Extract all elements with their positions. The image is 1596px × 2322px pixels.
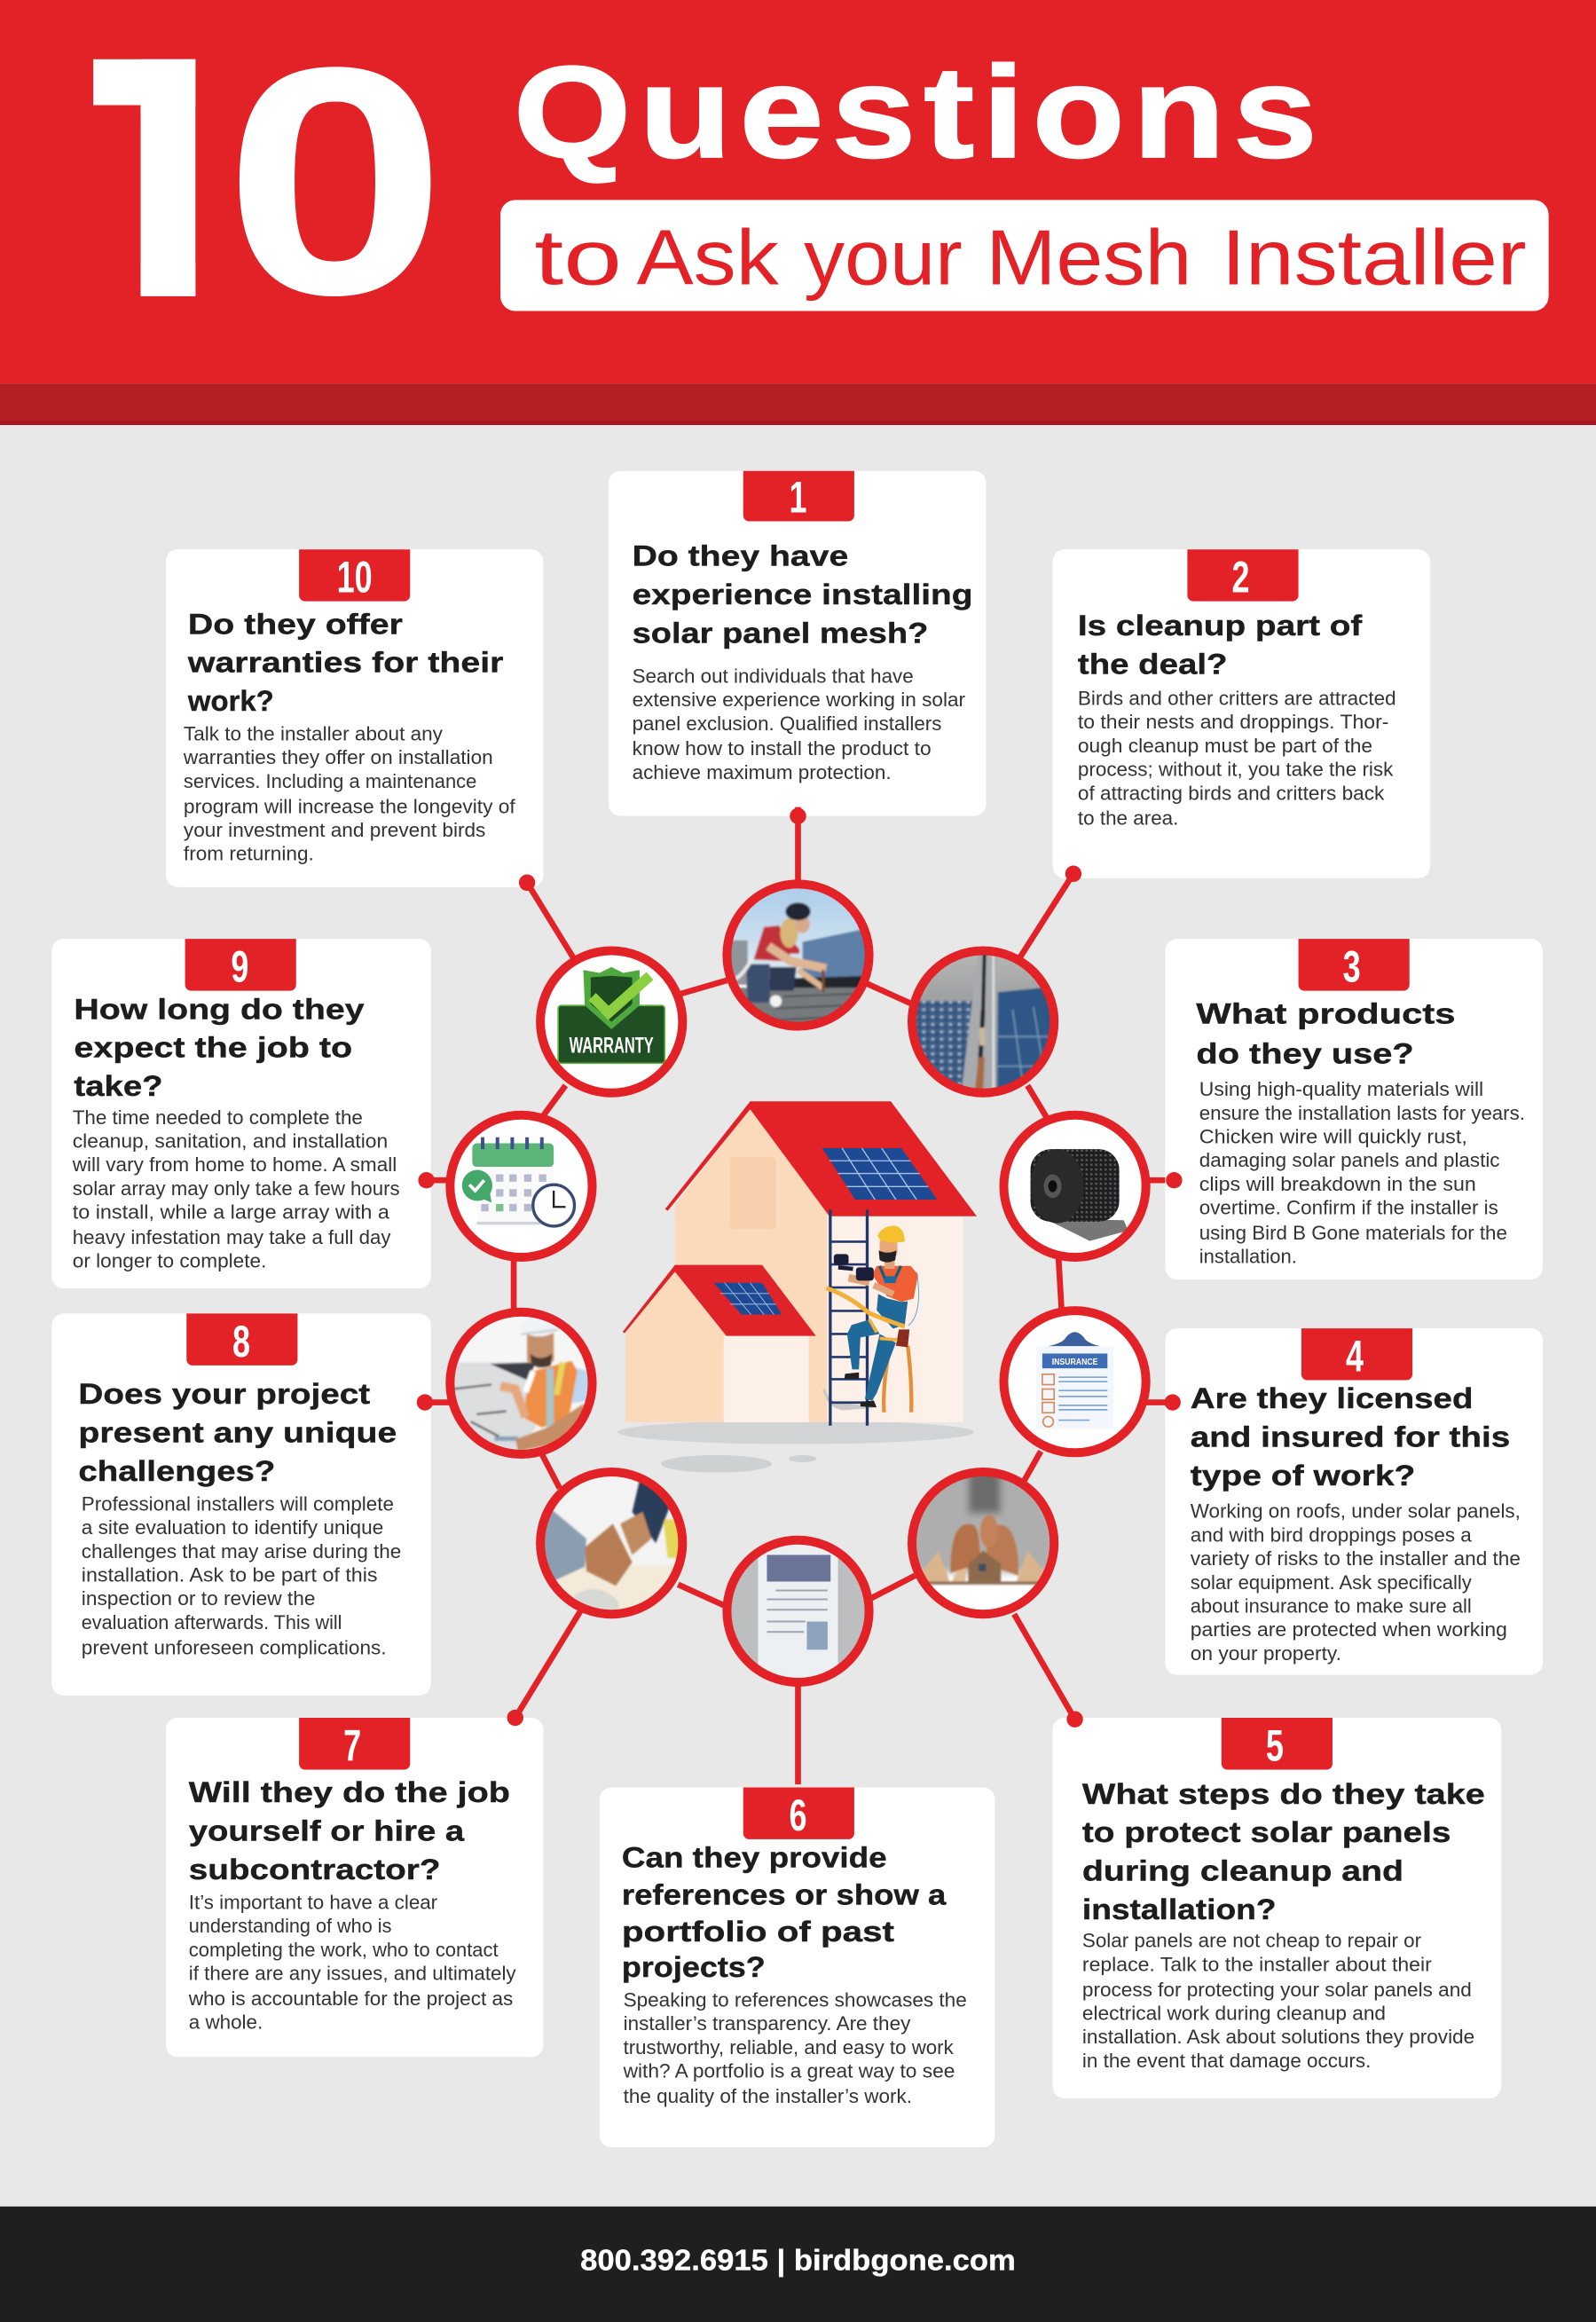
- panel: question 10: warranties they offer on installation: [183, 746, 493, 768]
- panel: question 5: [1053, 1712, 1501, 2098]
- panel: question 10: from returning.: [184, 843, 314, 865]
- panel: question 3: using Bird B Gone materials for the: [1199, 1222, 1507, 1244]
- panel: question 8: prevent unforeseen complications.: [82, 1636, 387, 1658]
- panel: question 5: What steps do they take: [1082, 1777, 1485, 1810]
- panel: question 9: [51, 939, 435, 1288]
- panel: question 4: 4: [1346, 1331, 1364, 1381]
- panel: question 6: references or show a: [622, 1877, 947, 1910]
- panel: question 10: work?: [187, 684, 274, 717]
- panel: question 3: [1165, 939, 1543, 1279]
- footer bar: 800.392.6915 | birdbgone.com: [580, 2245, 1016, 2278]
- panel: question 3: clips will breakdown in the sun: [1199, 1173, 1476, 1195]
- panel: question 4: solar equipment. Ask specifically: [1191, 1571, 1473, 1594]
- panel: question 6: Can they provide: [622, 1841, 887, 1874]
- panel: question 7: Will they do the job: [189, 1775, 510, 1808]
- panel: question 9: take?: [74, 1069, 163, 1102]
- panel: question 2: to their nests and droppings. Thor-: [1078, 711, 1388, 733]
- panel: question 5: 5: [1266, 1720, 1284, 1770]
- panel: question 2: 2: [1231, 553, 1249, 602]
- panel: question 1: Search out individuals that have: [633, 665, 914, 687]
- panel: question 5: during cleanup and: [1082, 1854, 1403, 1887]
- circle 4: insurance clipboard: [1003, 1311, 1146, 1452]
- panel: question 10: services. Including a maintenance: [184, 770, 476, 792]
- panel: question 3: installation.: [1199, 1246, 1297, 1268]
- circle 7: handshake photo: [538, 1468, 686, 1618]
- panel: question 4: type of work?: [1191, 1459, 1415, 1492]
- panel: question 4: on your property.: [1191, 1642, 1341, 1665]
- panel: question 7: a whole.: [189, 2011, 263, 2034]
- title: big number 10: 1: [74, 4, 250, 366]
- panel: question 1: 1: [789, 472, 807, 522]
- panel: question 2: Birds and other critters are attracted: [1078, 687, 1396, 709]
- panel: question 8: [51, 1313, 433, 1696]
- panel: question 5: installation?: [1082, 1893, 1277, 1925]
- panel: question 4: Working on roofs, under solar panels,: [1191, 1500, 1521, 1523]
- panel: question 7: yourself or hire a: [189, 1814, 465, 1847]
- subtitle box: your: [804, 213, 963, 301]
- subtitle box: [500, 200, 1549, 311]
- panel: question 9: How long do they: [74, 992, 366, 1025]
- panel: question 3: Using high-quality materials will: [1199, 1078, 1483, 1100]
- panel: question 7: 7: [343, 1720, 361, 1770]
- panel: question 9: will vary from home to home. A small: [72, 1153, 397, 1176]
- panel: question 1: [609, 471, 986, 824]
- circle 6: portfolio document: [727, 1540, 869, 1682]
- panel: question 9: The time needed to complete the: [73, 1106, 363, 1129]
- subtitle box: to: [534, 213, 622, 301]
- panel: question 3: damaging solar panels and plastic: [1199, 1149, 1500, 1171]
- panel: question 10: your investment and prevent birds: [184, 819, 485, 841]
- panel: question 9: expect the job to: [74, 1031, 352, 1064]
- panel: question 10: Do they offer: [188, 607, 403, 640]
- circle 8: contractor in safety vest photo: [447, 1312, 593, 1454]
- panel: question 9: 9: [231, 942, 248, 992]
- panel: question 9: heavy infestation may take a full day: [73, 1226, 391, 1248]
- panel: question 1: solar panel mesh?: [633, 616, 928, 649]
- panel: question 1: extensive experience working in solar: [633, 689, 966, 711]
- panel: question 8: installation. Ask to be part of this: [82, 1563, 378, 1586]
- panel: question 2: of attracting birds and critters back: [1078, 782, 1385, 804]
- panel: question 6: portfolio of past: [622, 1915, 894, 1948]
- panel: question 5: process for protecting your solar panels and: [1082, 1979, 1472, 2001]
- panel: question 7: [166, 1710, 543, 2057]
- panel: question 2: ough cleanup must be part of the: [1078, 735, 1372, 757]
- panel: question 2: to the area.: [1078, 807, 1178, 830]
- panel: question 5: in the event that damage occurs.: [1082, 2050, 1371, 2072]
- panel: question 3: overtime. Confirm if the installer is: [1199, 1197, 1498, 1219]
- panel: question 4: and with bird droppings poses a: [1191, 1523, 1472, 1546]
- circle 10: warranty badge: WARRANTY: [570, 1034, 654, 1059]
- panel: question 3: do they use?: [1196, 1036, 1414, 1069]
- circle 4: insurance clipboard: INSURANCE: [1052, 1358, 1098, 1367]
- circle 1: installer on roof photo: [724, 881, 872, 1029]
- panel: question 4: Are they licensed: [1191, 1381, 1473, 1414]
- panel: question 8: inspection or to review the: [82, 1587, 315, 1610]
- panel: question 8: present any unique: [78, 1416, 397, 1449]
- title: big number 10: [59, 0, 447, 366]
- subtitle box: Mesh: [986, 213, 1191, 301]
- panel: question 9: solar array may only take a few hours: [73, 1177, 400, 1200]
- panel: question 7: if there are any issues, and ultimately: [189, 1962, 516, 1984]
- ladder and worker: [822, 1209, 920, 1426]
- panel: question 1: achieve maximum protection.: [633, 761, 892, 783]
- panel: question 8: evaluation afterwards. This will: [82, 1611, 342, 1633]
- footer bar: [0, 2207, 1596, 2322]
- panel: question 3: Chicken wire will quickly rust,: [1199, 1125, 1467, 1147]
- panel: question 9: or longer to complete.: [73, 1250, 266, 1272]
- panel: question 4: [1165, 1328, 1543, 1675]
- circle 2: bird nest under solar panels photo: [909, 948, 1057, 1096]
- panel: question 8: challenges?: [78, 1454, 275, 1487]
- panel: question 4: about insurance to make sure all: [1191, 1595, 1472, 1618]
- panel: question 4: parties are protected when working: [1191, 1618, 1507, 1641]
- panel: question 5: replace. Talk to the installer about their: [1082, 1953, 1432, 1975]
- panel: question 8: 8: [232, 1317, 250, 1366]
- panel: question 1: panel exclusion. Qualified installers: [633, 712, 941, 735]
- panel: question 7: understanding of who is: [189, 1915, 391, 1937]
- panel: question 10: [166, 549, 543, 891]
- panel: question 10: program will increase the longevity of: [184, 795, 516, 817]
- panel: question 6: with? A portfolio is a great way to see: [623, 2060, 955, 2082]
- panel: question 4: and insured for this: [1191, 1421, 1510, 1453]
- subtitle box: Ask: [637, 213, 780, 301]
- panel: question 2: [1053, 549, 1430, 882]
- panel: question 7: It’s important to have a clear: [189, 1891, 438, 1913]
- panel: question 3: 3: [1343, 942, 1361, 992]
- panel: question 5: installation. Ask about solutions they provide: [1082, 2026, 1474, 2048]
- panel: question 1: Do they have: [633, 539, 848, 572]
- panel: question 2: process; without it, you take the risk: [1078, 759, 1394, 781]
- circle 3: black mesh roll: [1003, 1115, 1146, 1257]
- subtitle box: Installer: [1222, 213, 1527, 301]
- panel: question 8: challenges that may arise during the: [82, 1540, 401, 1562]
- panel: question 6: 6: [789, 1791, 807, 1840]
- panel: question 6: [600, 1787, 995, 2147]
- panel: question 8: Professional installers will complete: [82, 1492, 394, 1515]
- panel: question 2: the deal?: [1078, 647, 1227, 680]
- title: big number 10: 0: [224, 0, 447, 362]
- panel: question 4: variety of risks to the installer and the: [1191, 1547, 1521, 1570]
- circle 5: hands protecting small house photo: [909, 1469, 1057, 1614]
- panel: question 10: 10: [337, 553, 373, 602]
- panel: question 5: Solar panels are not cheap to repair or: [1082, 1930, 1422, 1952]
- panel: question 7: completing the work, who to contact: [189, 1939, 499, 1961]
- panel: question 9: cleanup, sanitation, and installation: [73, 1130, 388, 1152]
- panel: question 1: experience installing: [633, 578, 972, 610]
- panel: question 1: know how to install the product to: [633, 737, 932, 760]
- panel: question 8: Does your project: [78, 1377, 370, 1410]
- panel: question 8: a site evaluation to identify unique: [82, 1516, 383, 1539]
- circle 9: calendar and clock icon: [450, 1115, 593, 1257]
- panel: question 3: ensure the installation lasts for years.: [1199, 1102, 1525, 1124]
- circle 10: warranty badge: [540, 951, 682, 1093]
- panel: question 10: warranties for their: [187, 646, 504, 679]
- panel: question 6: Speaking to references showcases the: [624, 1989, 967, 2011]
- connector lines: [417, 807, 1183, 1784]
- panel: question 5: electrical work during cleanup and: [1082, 2003, 1386, 2025]
- panel: question 6: installer’s transparency. Are they: [624, 2012, 911, 2035]
- panel: question 7: who is accountable for the project as: [188, 1987, 513, 2010]
- central house illustration: [617, 1101, 977, 1473]
- panel: question 2: Is cleanup part of: [1078, 609, 1362, 642]
- panel: question 9: to install, while a large array with a: [73, 1201, 390, 1224]
- panel: question 6: the quality of the installer’s work.: [624, 2085, 912, 2107]
- panel: question 5: to protect solar panels: [1082, 1815, 1451, 1848]
- panel: question 7: subcontractor?: [189, 1853, 440, 1885]
- panel: question 3: What products: [1196, 996, 1455, 1029]
- panel: question 6: projects?: [622, 1950, 766, 1983]
- header banner: [0, 0, 1596, 425]
- title: Questions: Questions: [514, 39, 1317, 185]
- panel: question 6: trustworthy, reliable, and easy to work: [624, 2036, 955, 2058]
- panel: question 10: Talk to the installer about any: [184, 723, 444, 745]
